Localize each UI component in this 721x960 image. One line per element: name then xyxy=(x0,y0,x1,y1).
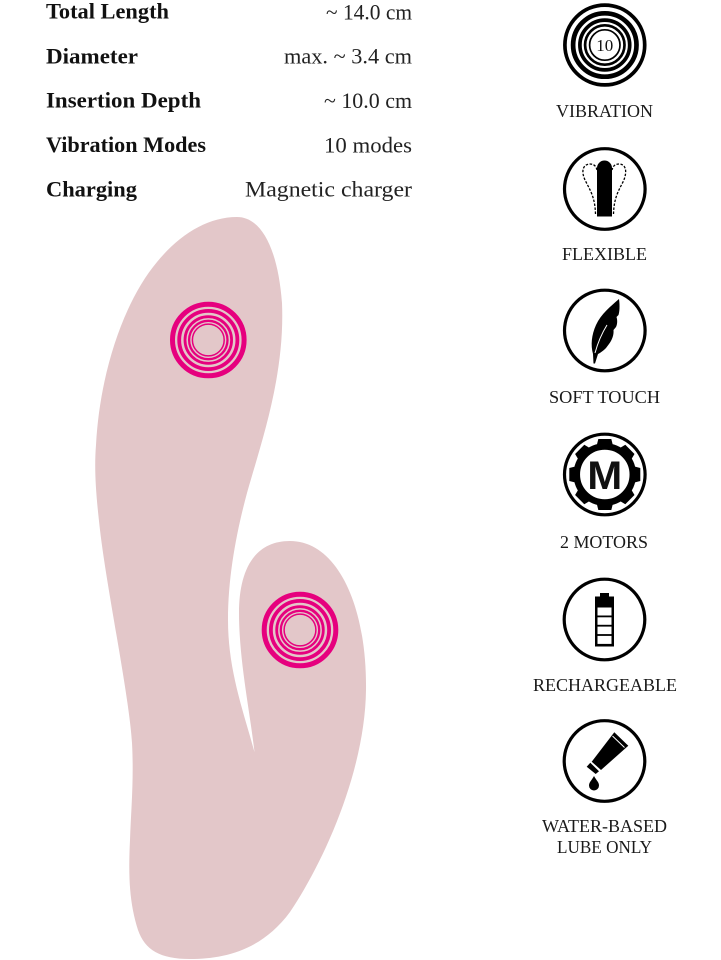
feature: soft touch xyxy=(549,290,660,407)
spec: vibration modes: 10 modes xyxy=(324,132,412,158)
icon: feather xyxy=(564,290,645,371)
spec: diameter: max. ~ 3.4 cm xyxy=(284,44,412,68)
label: water-based lube only: LUBE ONLY xyxy=(557,837,652,857)
icon: lube tube and drop xyxy=(564,721,645,801)
spec: diameter xyxy=(46,44,412,68)
feature: 2 motors xyxy=(560,434,648,552)
label: vibration: VIBRATION xyxy=(556,101,653,121)
spec: charging: Charging xyxy=(46,176,137,202)
spec: charging xyxy=(46,176,413,202)
label: water-based lube only: WATER-BASED xyxy=(542,816,667,836)
spec: insertion depth: ~ 10.0 cm xyxy=(324,88,412,113)
vibration rings: lower motor xyxy=(264,594,336,666)
spec table xyxy=(46,0,413,202)
label: soft touch: SOFT TOUCH xyxy=(549,387,660,407)
icon: battery xyxy=(564,579,645,660)
spec: total length xyxy=(46,0,412,24)
spec: diameter: Diameter xyxy=(46,44,138,68)
spec: vibration modes xyxy=(46,132,412,158)
product silhouette xyxy=(95,217,366,959)
spec: insertion depth: Insertion Depth xyxy=(46,88,201,112)
label: water-based lube only xyxy=(542,816,667,857)
spec: charging: Magnetic charger xyxy=(245,176,413,202)
label: flexible: FLEXIBLE xyxy=(562,244,647,264)
feature: water-based lube only xyxy=(542,721,667,857)
spec: total length: ~ 14.0 cm xyxy=(326,0,412,24)
spec: insertion depth xyxy=(46,88,412,113)
feature: rechargeable xyxy=(533,579,677,695)
feature: flexible xyxy=(562,149,647,264)
label: rechargeable: RECHARGEABLE xyxy=(533,675,677,695)
icon: flexible shaft xyxy=(564,149,645,229)
icon: vibration rings: 10 xyxy=(596,36,613,55)
vibration rings: upper motor xyxy=(172,304,244,376)
label: 2 motors: 2 MOTORS xyxy=(560,532,648,552)
spec: vibration modes: Vibration Modes xyxy=(46,132,206,157)
icon: gear with M: M xyxy=(587,454,622,498)
feature: vibration xyxy=(556,5,653,121)
